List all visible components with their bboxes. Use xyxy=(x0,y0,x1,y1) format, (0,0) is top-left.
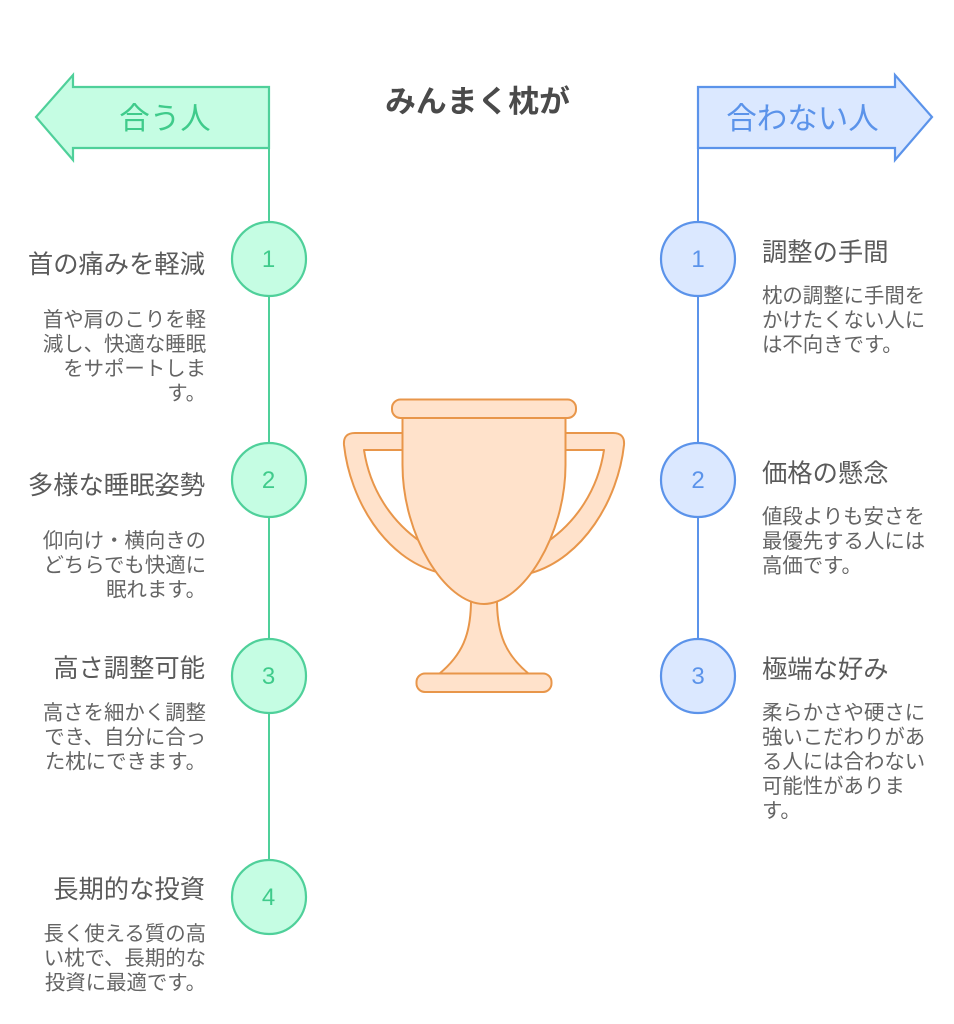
trophy rim xyxy=(392,400,576,418)
item 2: right: 高価です。 xyxy=(762,554,862,578)
item 4: left: 長期的な投資 xyxy=(53,876,205,904)
arrow header: 合う人: 合う人 xyxy=(119,102,211,136)
panel: unsuitable people (right) xyxy=(661,75,932,822)
trophy right handle xyxy=(531,433,624,573)
arrow header: 合う人 xyxy=(36,75,269,160)
item 4: left: 投資に最適です。 xyxy=(45,972,206,994)
item 1: right: は不向きです。 xyxy=(762,334,903,356)
item 2: left: 仰向け・横向きの xyxy=(43,530,206,552)
trophy stem xyxy=(439,600,529,674)
item 3: right: す。 xyxy=(762,800,801,822)
item 3: left: 高さを細かく調整 xyxy=(43,702,206,724)
item 2: right xyxy=(661,443,925,578)
item 2: left: どちらでも快適に xyxy=(43,554,206,577)
icon: trophy xyxy=(344,400,624,692)
panel: suitable people (left) xyxy=(28,75,306,994)
item 2: right: 最優先する人には xyxy=(762,530,925,553)
trophy base xyxy=(416,674,552,692)
item 1: left: をサポートしま xyxy=(63,358,206,380)
item 3: left: た枕にできます。 xyxy=(45,750,206,774)
item 3: right: 柔らかさや硬さに xyxy=(762,702,925,724)
item 1: right: 1 xyxy=(691,246,705,273)
item 3: left: でき、自分に合っ xyxy=(44,726,206,749)
timeline line: right xyxy=(697,148,699,676)
item 1: right: 調整の手間 xyxy=(762,239,888,267)
item 4: left xyxy=(43,860,306,994)
trophy left handle xyxy=(344,433,437,572)
item 3: right: 3 xyxy=(691,663,705,690)
item 2: right: 値段よりも安さを xyxy=(762,506,925,528)
item 3: right: 可能性がありま xyxy=(762,775,905,798)
item 3: left: 高さ調整可能 xyxy=(53,655,205,683)
item 2: left: 2 xyxy=(262,467,275,494)
item 2: left xyxy=(28,443,306,602)
item 3: right xyxy=(661,639,925,822)
item 2: left: 眠れます。 xyxy=(106,580,206,602)
item 1: left: 首の痛みを軽減 xyxy=(28,251,205,279)
item 1: left: す。 xyxy=(167,383,206,405)
item 1: right xyxy=(661,222,925,356)
item 3: right: 極端な好み xyxy=(762,656,888,684)
item 1: right: 枕の調整に手間を xyxy=(762,284,925,308)
item 3: right: 強いこだわりがあ xyxy=(762,726,925,749)
item 2: right: 価格の懸念 xyxy=(762,460,888,488)
item 4: left: 4 xyxy=(262,884,275,911)
item 3: left: 3 xyxy=(262,663,275,690)
item 1: left: 1 xyxy=(262,246,275,273)
arrow header: 合わない人 xyxy=(698,75,932,160)
item 1: right: かけたくない人に xyxy=(762,310,925,332)
timeline line: left xyxy=(268,148,270,896)
item 2: right: 2 xyxy=(691,467,705,494)
arrow header: 合わない人: 合わない人 xyxy=(726,102,879,136)
item 4: left: 長く使える質の高 xyxy=(43,922,206,946)
item 1: left: 首や肩のこりを軽 xyxy=(43,308,206,332)
item 1: left xyxy=(28,222,306,405)
item 2: left: 多様な睡眠姿勢 xyxy=(28,472,205,500)
trophy cup xyxy=(402,417,566,604)
item 1: left: 減し、快適な睡眠 xyxy=(43,333,207,356)
item 4: left: い枕で、長期的な xyxy=(44,947,206,970)
item 3: left xyxy=(43,639,306,774)
title: みんまく枕が xyxy=(385,84,570,119)
item 3: right: る人には合わない xyxy=(762,750,925,774)
